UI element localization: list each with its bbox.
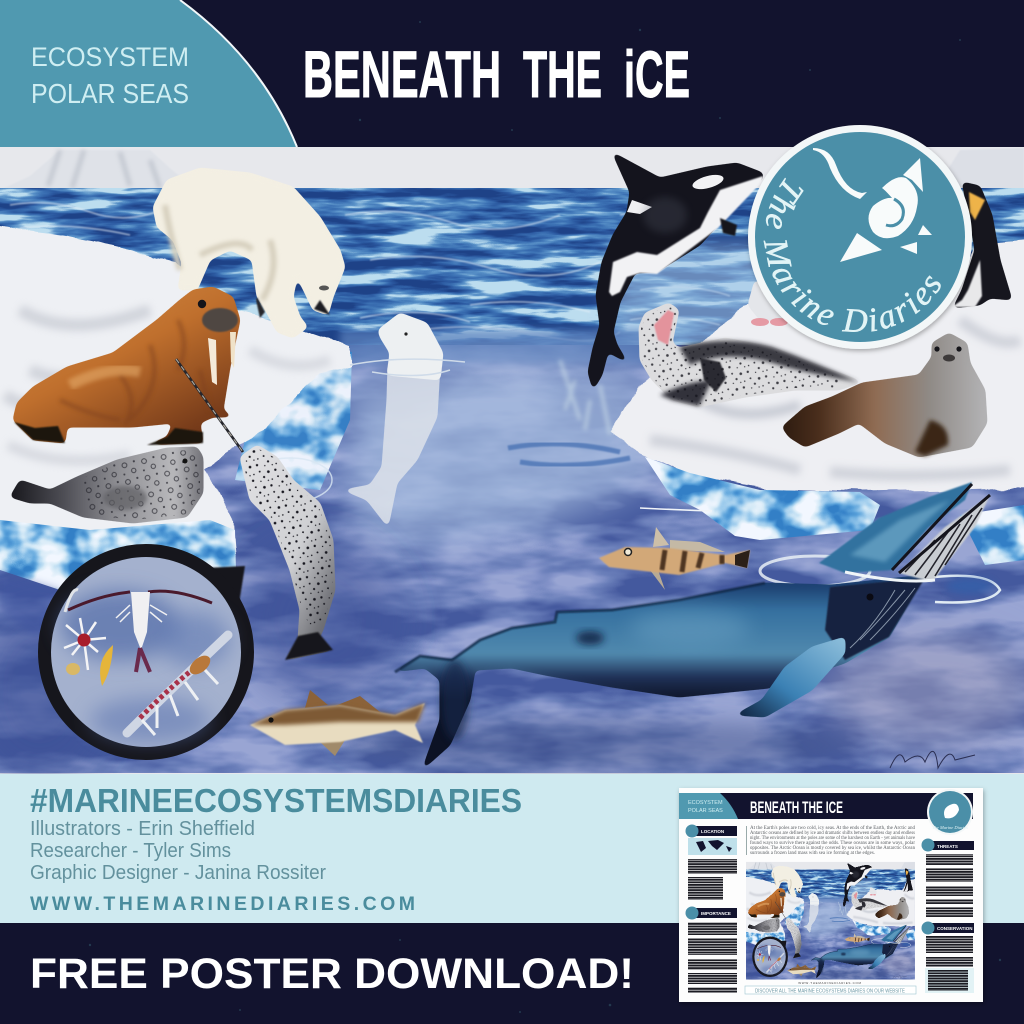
thumbnail intro text: night. The environments at the poles are some of the harshest on Earth - yet animals have	[750, 836, 916, 841]
thumbnail intro text	[746, 826, 916, 856]
credit lines	[30, 818, 326, 884]
thumbnail intro text: Antarctic oceans are defined by ice and dramatic shifts between endless day and endless	[750, 831, 915, 836]
category label	[31, 42, 189, 109]
thumbnail header: ECOSYSTEM	[688, 800, 723, 806]
header bar	[0, 0, 1024, 147]
thumbnail location section: LOCATION	[701, 829, 724, 834]
curved white edge	[180, 0, 297, 147]
thumbnail threats section	[922, 838, 974, 917]
thumbnail header: BENEATH THE ICE	[750, 798, 843, 817]
thumbnail location section	[686, 824, 737, 900]
thumbnail intro text: At the Earth's poles are two cold, icy seas. At the ends of the Earth, the Arctic and	[750, 826, 915, 831]
credit lines: Researcher - Tyler Sims	[30, 840, 231, 862]
poster thumbnail	[679, 788, 983, 1002]
thumbnail discover banner: DISCOVER ALL THE MARINE ECOSYSTEMS DIARIES ON OUR WEBSITE	[755, 988, 905, 994]
thumbnail intro text: opposites. The Arctic Ocean is mostly covered by sea ice, whilst the Antarctic Ocean	[750, 846, 915, 851]
thumbnail logo	[927, 789, 973, 835]
icon: manta ray	[813, 148, 932, 262]
panel: footer	[0, 923, 1024, 1024]
panel: watercolour illustration	[0, 147, 1024, 780]
thumbnail intro text: surrounds a frozen land mass with sea ice forming at the edges.	[750, 851, 875, 856]
category label: ECOSYSTEM	[31, 42, 189, 72]
logo: The Marine Diaries: The Marine Diaries	[764, 178, 941, 332]
thumbnail intro text: found ways to survive there against the odds. These oceans are in some ways, polar	[750, 841, 915, 846]
logo wordmark	[765, 176, 946, 332]
thumbnail conservation section	[922, 922, 974, 993]
logo: The Marine Diaries	[746, 125, 974, 354]
panel: credits	[0, 774, 1024, 923]
credit lines: Illustrators - Erin Sheffield	[30, 818, 255, 840]
website: WWW.THEMARINEDIARIES.COM	[30, 893, 415, 915]
thumbnail painting	[741, 862, 918, 981]
call to action: FREE POSTER DOWNLOAD!	[30, 950, 634, 998]
thumbnail conservation section: CONSERVATION	[937, 926, 973, 931]
teal corner panel	[0, 0, 297, 147]
thumbnail threats section: THREATS	[937, 844, 958, 849]
thumbnail importance section: IMPORTANCE	[701, 911, 731, 916]
thumbnail discover banner	[745, 986, 916, 994]
category label: POLAR SEAS	[31, 78, 189, 109]
title: THE	[523, 37, 602, 111]
thumbnail website: WWW.THEMARINEDIARIES.COM	[798, 981, 862, 985]
thumbnail header: POLAR SEAS	[688, 808, 723, 814]
credit lines: Graphic Designer - Janina Rossiter	[30, 862, 326, 884]
thumbnail header	[679, 793, 973, 819]
thumbnail logo: The Marine Diaries	[932, 825, 968, 830]
title: BENEATH	[303, 37, 501, 111]
hashtag heading: #MARINEECOSYSTEMSDIARIES	[30, 782, 522, 819]
title: iCE	[624, 37, 690, 111]
thumbnail importance section	[686, 906, 737, 993]
